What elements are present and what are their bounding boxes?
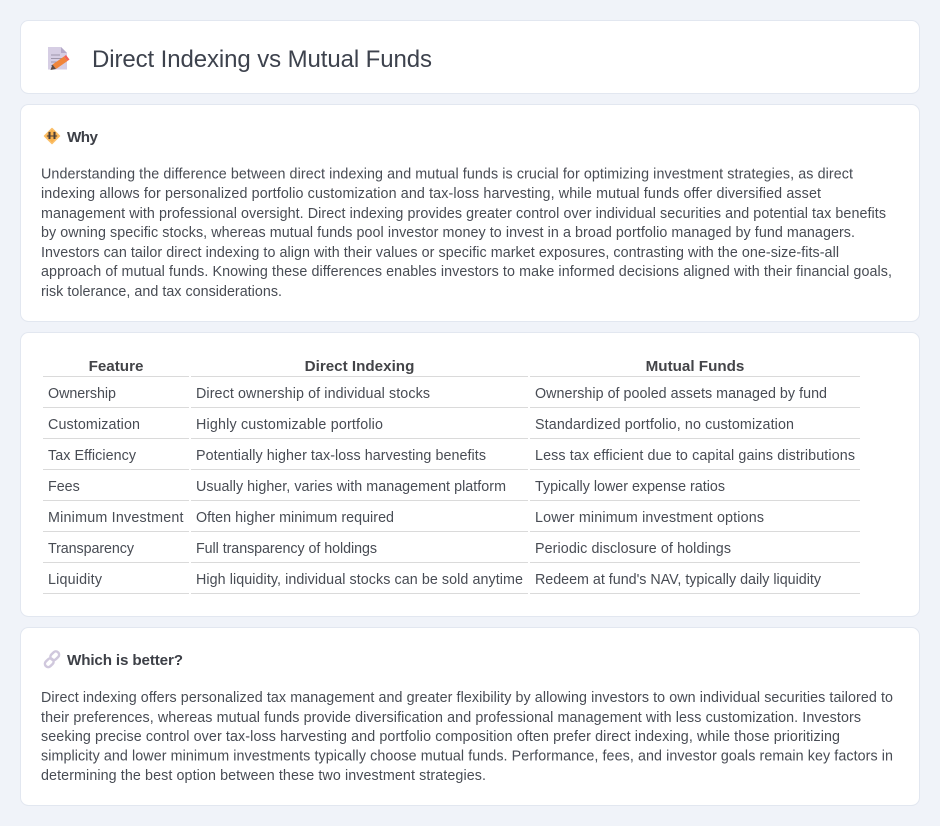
text block: verdict: determining the best option between these two investment strategies. xyxy=(41,768,486,784)
text block: why explanation: by owning specific stocks, whereas mutual funds pool investor money to invest in a broad portfolio managed by fund managers. xyxy=(41,225,855,241)
row: ownership xyxy=(48,386,827,402)
row: minimum investment: Minimum Investment xyxy=(48,510,184,526)
row: ownership: Direct ownership of individual stocks xyxy=(196,386,430,402)
text block: verdict: Direct indexing offers personalized tax management and greater flexibility by allowing investors to own individual securities tailored to xyxy=(41,690,893,706)
row: customization: Highly customizable portfolio xyxy=(196,417,383,433)
row: minimum investment: Often higher minimum required xyxy=(196,510,394,526)
text block: why explanation: management with professional oversight. Direct indexing provides greater control over individual securities and potential tax benefits xyxy=(41,206,886,222)
row: tax efficiency xyxy=(48,448,855,464)
icon: chain link xyxy=(44,650,60,668)
text block: why explanation xyxy=(41,166,892,300)
panel: comparison table xyxy=(20,332,920,616)
row: liquidity: High liquidity, individual stocks can be sold anytime xyxy=(196,572,523,588)
row: customization: Standardized portfolio, no customization xyxy=(535,417,794,433)
text block: why explanation: approach of mutual funds. Knowing these differences enables investors to make informed decisions aligned with their financial goals, xyxy=(41,264,892,280)
text block: verdict: their preferences, whereas mutual funds provide diversification and professional management with less customization. Investors xyxy=(41,710,861,726)
panel: which is better xyxy=(20,628,920,806)
title: Direct Indexing vs Mutual Funds xyxy=(92,46,432,73)
table header row: Direct Indexing xyxy=(305,358,414,375)
text block: why explanation: indexing allows for personalized portfolio customization and tax-loss harvesting, while mutual funds offer diversified asset xyxy=(41,186,821,202)
row: fees: Usually higher, varies with management platform xyxy=(196,479,506,495)
icon: warning diamond xyxy=(44,128,60,144)
row: liquidity: Redeem at fund's NAV, typically daily liquidity xyxy=(535,572,822,588)
text block: verdict: simplicity and lower minimum investments typically choose mutual funds. Performance, fees, and investor goals remain key factors in xyxy=(41,748,893,764)
row: liquidity xyxy=(48,572,822,588)
row: tax efficiency: Tax Efficiency xyxy=(48,448,137,464)
row: minimum investment xyxy=(48,510,764,526)
table header row: Mutual Funds xyxy=(646,358,744,375)
text block: why explanation: Understanding the difference between direct indexing and mutual funds is crucial for optimizing investment strategies, as direct xyxy=(41,166,853,182)
row: transparency: Transparency xyxy=(48,541,135,557)
row: minimum investment: Lower minimum investment options xyxy=(535,510,764,526)
text block: verdict: seeking precise control over tax-loss harvesting and portfolio composition often prefer direct indexing, while those prioritizing xyxy=(41,729,840,745)
heading: which is better: Which is better? xyxy=(67,652,183,669)
text block: why explanation: Investors can tailor direct indexing to align with their values or specific market exposures, contrasting with the one-size-fits-all xyxy=(41,245,839,261)
row: ownership: Ownership xyxy=(48,386,116,402)
text block: why explanation: risk tolerance, and tax considerations. xyxy=(41,284,282,300)
row: fees: Typically lower expense ratios xyxy=(535,479,725,495)
icon: document with pencil xyxy=(48,47,70,70)
row: ownership: Ownership of pooled assets managed by fund xyxy=(535,386,827,402)
row: fees xyxy=(48,479,725,495)
row: tax efficiency: Potentially higher tax-loss harvesting benefits xyxy=(196,448,486,464)
row: fees: Fees xyxy=(48,479,80,495)
row: transparency: Periodic disclosure of holdings xyxy=(535,541,731,557)
table header row xyxy=(89,358,744,375)
row: transparency: Full transparency of holdings xyxy=(196,541,377,557)
row: customization: Customization xyxy=(48,417,140,433)
panel: header xyxy=(20,20,920,94)
row: liquidity: Liquidity xyxy=(48,572,103,588)
text block: verdict xyxy=(41,690,893,784)
heading: why: Why xyxy=(67,129,99,146)
table header row: Feature xyxy=(89,358,143,375)
panel: why xyxy=(20,104,920,322)
row: tax efficiency: Less tax efficient due to capital gains distributions xyxy=(535,448,855,464)
row: transparency xyxy=(48,541,731,557)
row: customization xyxy=(48,417,794,433)
